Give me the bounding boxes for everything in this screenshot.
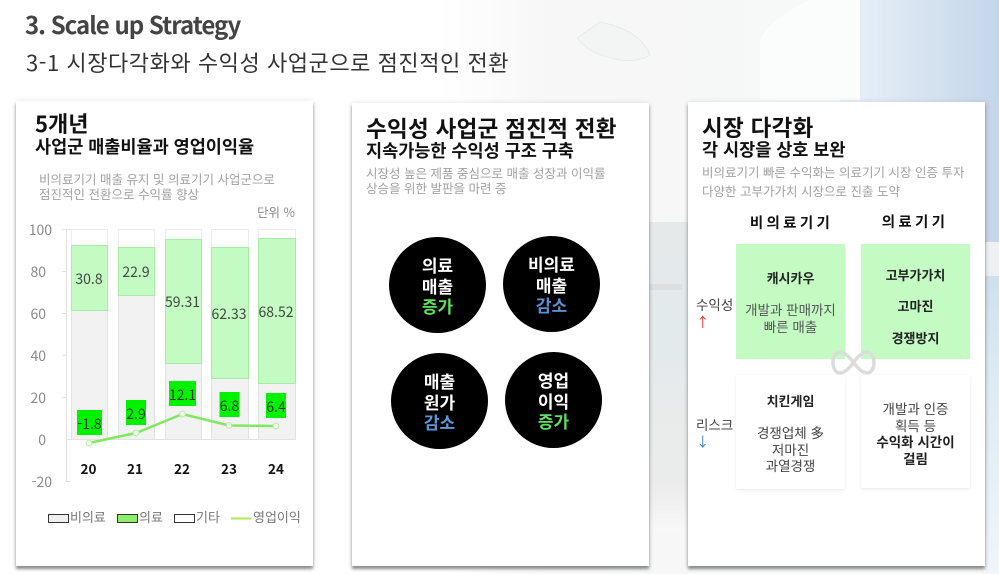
quadrant: long monetization	[861, 375, 970, 488]
panel 1 subheading: 사업군 매출비율과 영업이익율	[35, 134, 254, 159]
circle: cost of sales decrease: 원가	[424, 389, 455, 414]
panel 2 description: 시장성 높은 제품 중심으로 매출 성장과 이익률	[366, 163, 606, 182]
row label: profitability: ↑	[696, 311, 710, 331]
circle: operating profit increase: 증가	[538, 408, 569, 433]
medical share values: 62.33	[212, 304, 246, 324]
panel 3 subheading: 각 시장을 상호 보완	[702, 137, 846, 162]
panel 1 description: 비의료기기 매출 유지 및 의료기기 사업군으로	[39, 169, 275, 188]
operating margin labels: -1.8	[77, 414, 102, 434]
circle: operating profit increase: 이익	[538, 388, 569, 413]
circle: operating profit increase	[505, 352, 602, 448]
medical share values: 59.31	[165, 292, 200, 312]
legend: 의료	[139, 507, 163, 526]
quadrant: high value-added: 경쟁방지	[892, 328, 939, 347]
y axis: 80	[30, 262, 46, 282]
bars: 비의료 (non-medical)	[72, 296, 296, 440]
row label: risk: 리스크	[696, 414, 733, 434]
panel: gradual shift to profitable business	[352, 103, 649, 566]
circle: non-medical sales decrease: 비의료	[528, 251, 575, 276]
chicken game text: 경쟁업체 多	[757, 422, 824, 442]
cash cow text: 빠른 매출	[764, 316, 817, 336]
medical share values: 68.52	[258, 302, 294, 322]
y axis: 40	[30, 346, 46, 366]
bars: 의료 (medical)	[72, 238, 296, 384]
x axis years	[81, 458, 284, 478]
x axis years: 20	[81, 458, 96, 478]
panel 2 subheading: 지속가능한 수익성 구조 구축	[366, 138, 574, 163]
circle: non-medical sales decrease: 감소	[536, 292, 567, 317]
circle: medical sales increase: 증가	[422, 293, 453, 318]
panel 3 description	[702, 162, 965, 200]
x axis years: 22	[174, 458, 190, 478]
chicken game text: 저마진	[772, 438, 809, 458]
y axis: -20	[32, 472, 52, 492]
panel: market diversification	[688, 102, 985, 566]
operating margin labels	[77, 381, 286, 435]
medical share values	[75, 262, 294, 324]
title: 3. Scale up Strategy	[25, 6, 240, 41]
unit label: 단위 %	[257, 202, 295, 221]
panel: 5-year revenue mix and operating margin	[16, 101, 313, 566]
y axis: 20	[30, 388, 46, 408]
operating margin labels: 12.1	[169, 385, 196, 405]
y axis: 0	[38, 430, 46, 450]
quadrant: high value-added	[861, 244, 970, 359]
cash cow text	[745, 299, 836, 336]
x axis years: 21	[127, 458, 143, 478]
quadrant: high value-added: 고부가가치	[886, 265, 945, 284]
legend: 기타	[196, 507, 220, 526]
legend: 영업이익	[253, 507, 301, 526]
row label: profitability	[696, 294, 733, 331]
row label: risk	[696, 414, 733, 451]
medical share values: 22.9	[122, 262, 150, 282]
quadrant: long monetization: 개발과 인증	[883, 398, 948, 418]
y axis	[29, 220, 295, 492]
circle: medical sales increase: 의료	[422, 252, 453, 277]
circle: medical sales increase	[389, 237, 486, 333]
circle: cost of sales decrease	[391, 353, 488, 449]
panel 1 heading: 5개년	[35, 107, 88, 139]
quadrant: long monetization: 수익화 시간이	[876, 431, 955, 451]
x axis years: 24	[268, 458, 284, 478]
row label: risk: ↓	[696, 431, 710, 451]
operating margin labels: 2.9	[126, 404, 146, 424]
icon: infinity	[831, 350, 876, 375]
panel 3 description: 비의료기기 빠른 수익화는 의료기기 시장 인증 투자	[702, 162, 965, 181]
circle: medical sales increase: 매출	[422, 273, 453, 298]
quadrant: long monetization: 걸림	[903, 448, 928, 468]
circle: non-medical sales decrease	[503, 236, 600, 332]
panel 3 description: 다양한 고부가가치 시장으로 진출 도약	[702, 180, 900, 200]
column header: non-medical: 비의료기기	[750, 212, 833, 233]
row label: profitability: 수익성	[696, 294, 733, 314]
chicken game text: 과열경쟁	[766, 455, 815, 475]
subtitle: 3-1 시장다각화와 수익성 사업군으로 점진적인 전환	[26, 46, 509, 78]
column header: medical: 의료기기	[882, 211, 948, 232]
quadrant: cash cow	[736, 244, 845, 359]
bars: 기타 (other)	[72, 230, 296, 248]
panel 2 heading: 수익성 사업군 점진적 전환	[366, 112, 617, 144]
panel 2 description: 상승을 위한 발판을 마련 중	[366, 178, 507, 197]
panel 3 heading: 시장 다각화	[702, 111, 814, 143]
panel 2 description	[366, 163, 606, 197]
operating margin line	[86, 411, 279, 446]
circle: non-medical sales decrease: 매출	[536, 272, 567, 297]
circle: cost of sales decrease: 매출	[424, 368, 455, 393]
cash cow text: 개발과 판매까지	[745, 299, 836, 319]
y axis: 60	[30, 304, 46, 324]
chicken game text	[757, 422, 824, 475]
stacked bar chart with operating margin line	[29, 220, 301, 526]
quadrant: long monetization: 획득 등	[895, 414, 936, 434]
x axis years: 23	[221, 458, 237, 478]
legend	[48, 507, 301, 526]
operating margin labels: 6.4	[266, 397, 286, 417]
cash cow title: 캐시카우	[767, 268, 814, 287]
legend: 비의료	[70, 507, 106, 526]
circle: operating profit increase: 영업	[538, 367, 569, 392]
panel 1 description: 점진적인 전환으로 수익률 향상	[39, 184, 199, 202]
quadrant: chicken game	[736, 375, 845, 489]
quadrant: high value-added: 고마진	[898, 296, 933, 315]
chicken game title: 치킨게임	[767, 391, 814, 410]
circle: cost of sales decrease: 감소	[424, 409, 455, 434]
y axis: 100	[29, 220, 52, 240]
operating margin labels: 6.8	[220, 396, 239, 416]
medical share values: 30.8	[75, 269, 103, 289]
panel 1 description	[39, 169, 275, 202]
